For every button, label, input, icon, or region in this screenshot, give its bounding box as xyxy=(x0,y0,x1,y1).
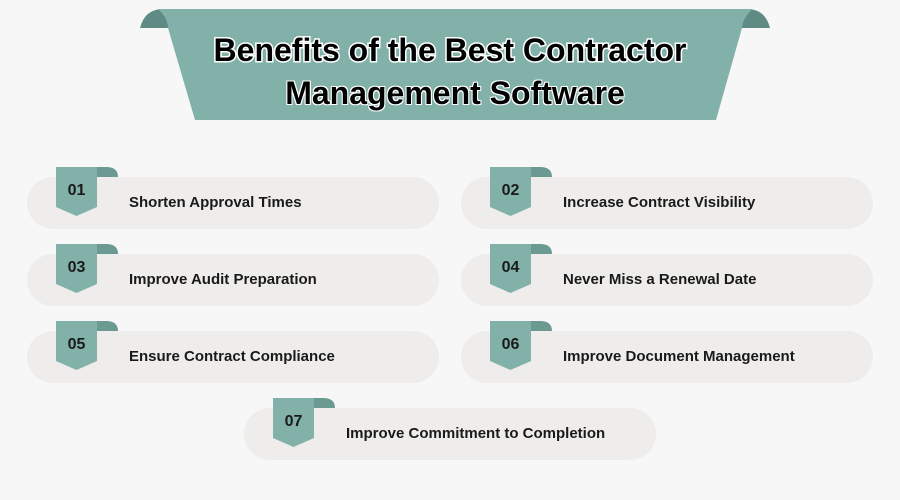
item 04: 04 xyxy=(502,259,519,276)
banner xyxy=(140,9,770,120)
item 06: Improve Document Management xyxy=(563,348,795,365)
item 05 xyxy=(27,321,439,383)
item 01: Shorten Approval Times xyxy=(129,194,302,211)
item 07 xyxy=(244,398,656,460)
item 02 xyxy=(461,167,873,229)
item 01 xyxy=(27,167,439,229)
item 04: Never Miss a Renewal Date xyxy=(563,271,756,288)
title line 2: Management Software xyxy=(285,75,625,111)
title: Benefits of the Best Contractor xyxy=(214,32,686,68)
item 07: Improve Commitment to Completion xyxy=(346,425,605,442)
item 05: Ensure Contract Compliance xyxy=(129,348,335,365)
item 04 xyxy=(461,244,873,306)
item 03: 03 xyxy=(68,259,85,276)
item 03 xyxy=(27,244,439,306)
item 01: 01 xyxy=(68,182,85,199)
item 02: 02 xyxy=(502,182,519,199)
item 06: 06 xyxy=(502,336,519,353)
item 03: Improve Audit Preparation xyxy=(129,271,317,288)
item 02: Increase Contract Visibility xyxy=(563,194,755,211)
item 06 xyxy=(461,321,873,383)
item 07: 07 xyxy=(285,413,302,430)
item 05: 05 xyxy=(68,336,85,353)
